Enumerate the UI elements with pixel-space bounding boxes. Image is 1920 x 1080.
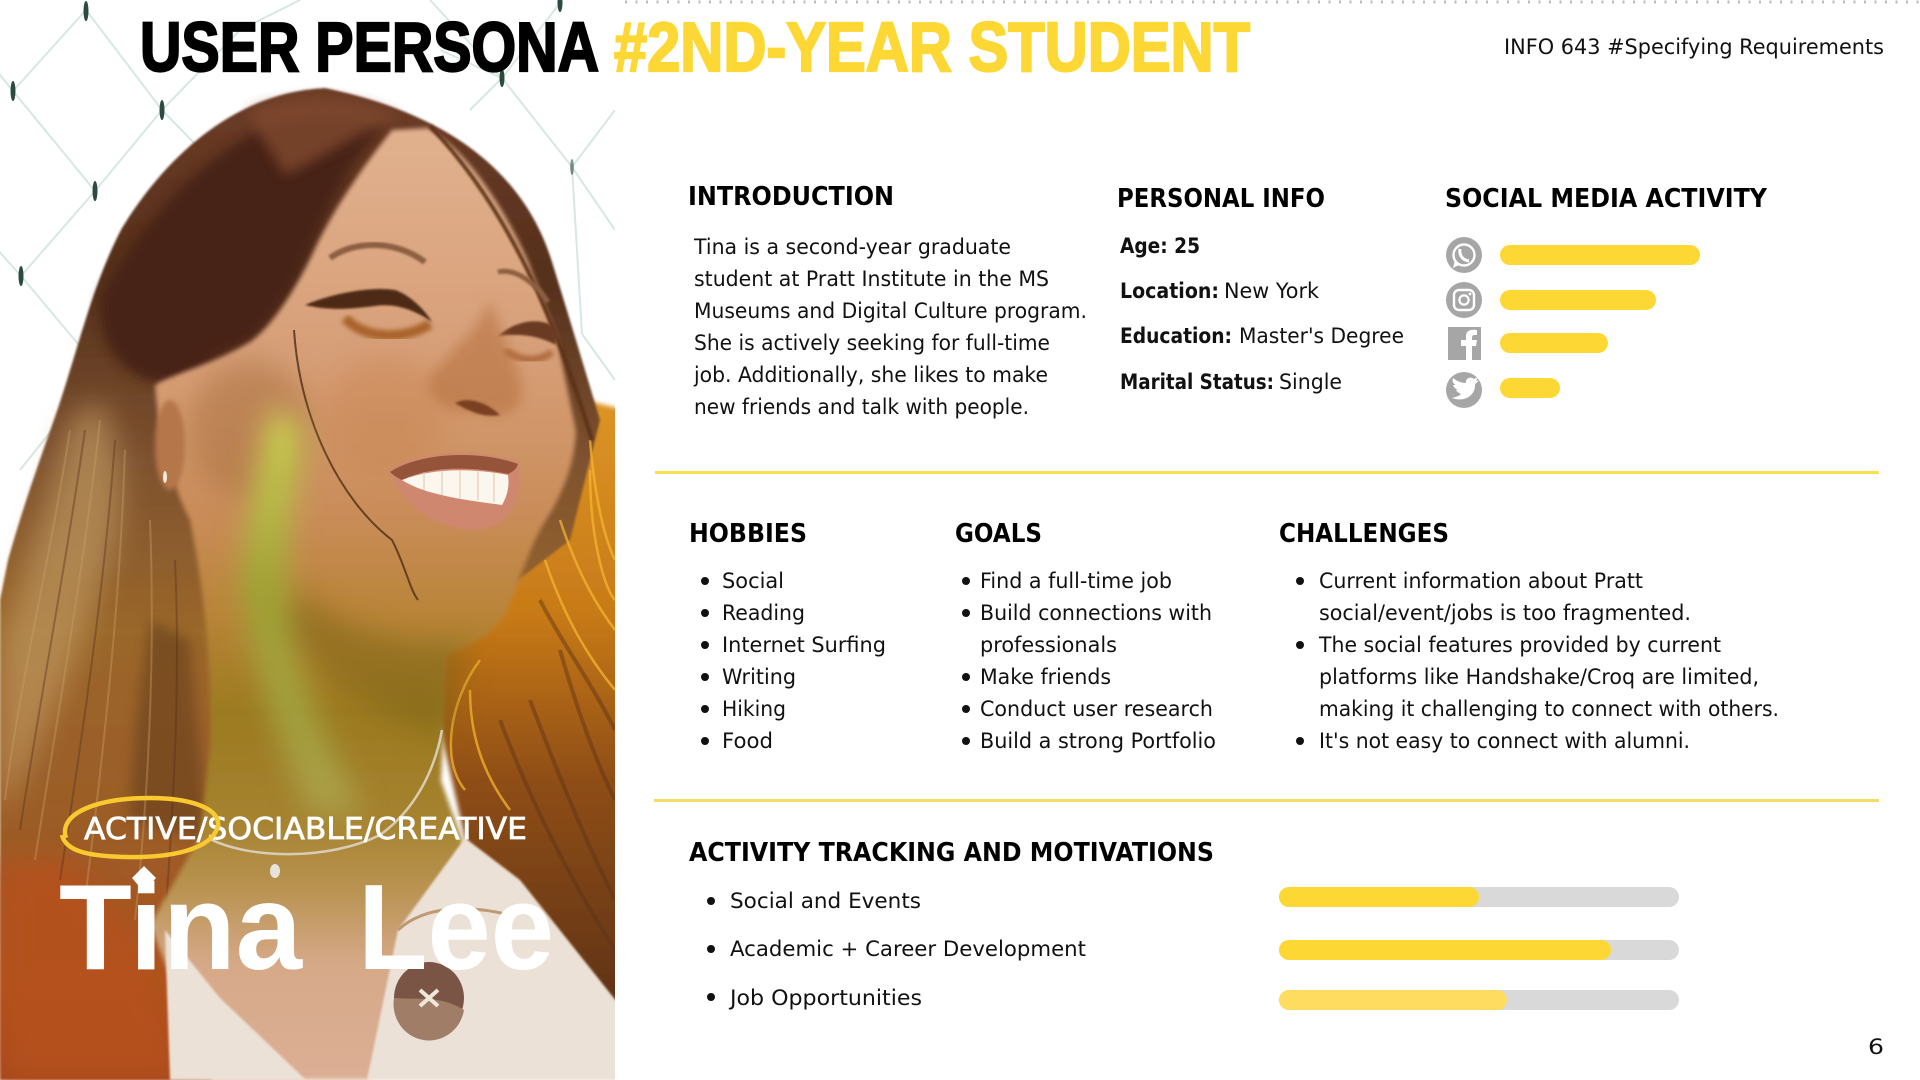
panel: introduction [688,182,1087,419]
panel: personal info: Education: [1120,324,1232,348]
smile [390,453,519,530]
panel: personal info: Single [1279,370,1342,394]
panel: goals: professionals [980,633,1117,657]
fence knots [10,0,574,286]
panel: personal info: Marital Status: [1120,370,1274,394]
ear [155,400,185,490]
panel: activity tracking and motivations: Job Opportunities [728,986,922,1010]
panel: introduction: job. Additionally, she likes to make [693,363,1048,387]
hair strands [5,420,152,920]
panel: introduction: Tina is a second-year graduate [693,235,1011,259]
course label: INFO 643 #Specifying Requirements [1504,35,1884,59]
hair side strand [294,330,418,600]
main hair [0,88,600,1080]
panel: personal info: Master's Degree [1239,324,1404,348]
right hair lit strands [451,440,615,810]
panel: personal info: Location: [1120,279,1219,303]
light hair parting [250,98,400,175]
panel: social media activity [1445,184,1768,408]
panel: challenges: making it challenging to connect with others. [1319,697,1779,721]
shirt button [394,962,464,1040]
panel: goals: Build a strong Portfolio [980,729,1216,753]
photo background: wire fence [0,0,615,470]
panel: hobbies: Internet Surfing [722,633,886,657]
panel: goals: Find a full-time job [980,569,1172,593]
panel: introduction: She is actively seeking for full-time [694,331,1050,355]
blouse left [165,930,306,1080]
right eye [498,321,556,359]
divider [655,471,1879,474]
icon: facebook [1448,327,1481,360]
panel: hobbies: Hiking [722,697,786,721]
panel: challenges: platforms like Handshake/Croq are limited, [1319,665,1759,689]
bar: facebook [1500,333,1608,353]
panel: goals: Make friends [980,665,1111,689]
bar: whatsapp [1500,245,1700,265]
right side back hair glow [440,398,615,1002]
panel: hobbies: Social [722,569,784,593]
panel: personal info: Age: 25 [1120,234,1200,258]
nose [428,300,522,416]
progress bar: academic and career development [1279,940,1679,960]
cheek shading [332,356,438,454]
panel: activity tracking and motivations: ACTIVITY TRACKING AND MOTIVATIONS [689,838,1214,868]
panel: activity tracking and motivations: Social and Events [730,889,921,913]
bar: twitter [1500,378,1560,398]
panel: challenges: CHALLENGES [1279,519,1449,549]
panel: personal info [1117,184,1404,394]
neck shadow [270,590,470,740]
panel: personal info: PERSONAL INFO [1117,184,1325,214]
panel: challenges: social/event/jobs is too fragmented. [1319,601,1691,625]
left eye [305,289,432,335]
panel: activity tracking and motivations [689,838,1679,1010]
divider [654,799,1879,802]
left hair highlights [0,400,121,820]
panel: introduction: student at Pratt Institute in the MS [694,267,1049,291]
panel: introduction: Museums and Digital Culture program. [694,299,1087,323]
panel: personal info: New York [1224,279,1320,303]
page number: 6 [1868,1035,1884,1059]
panel: goals: Build connections with [980,601,1212,625]
progress bar: job opportunities [1279,990,1679,1010]
panel: goals: GOALS [955,519,1042,549]
necklace [208,730,442,854]
hand-drawn circle highlight [62,798,218,857]
icon: instagram [1446,282,1482,318]
panel: challenges: The social features provided by current [1318,633,1721,657]
panel: challenges [1279,519,1779,753]
blouse right [367,838,625,1080]
panel: challenges: It's not easy to connect with alumni. [1319,729,1690,753]
dark hair crown [100,118,385,385]
panel: challenges: Current information about Pratt [1319,569,1643,593]
persona name: Tina [59,859,303,995]
panel: hobbies: HOBBIES [689,519,807,549]
panel: hobbies: Writing [722,665,796,689]
title: USER PERSONA [140,8,599,86]
panel: goals [955,519,1216,753]
face, neck and chest skin [150,128,576,1080]
panel: hobbies: Food [722,729,773,753]
panel: introduction: new friends and talk with people. [694,395,1029,419]
panel: activity tracking and motivations: Academic + Career Development [730,937,1086,961]
panel: hobbies: Reading [722,601,805,625]
bar: instagram [1500,290,1656,310]
title [140,8,1250,86]
persona name: Lee [358,859,554,995]
progress bar: social and events [1279,887,1679,907]
icon: whatsapp [1446,237,1482,273]
eyebrows [330,245,425,262]
persona name [59,859,554,995]
tagline: ACTIVE/SOCIABLE/CREATIVE [84,812,527,847]
photo: portrait of Tina Lee [0,0,625,1080]
panel: introduction: INTRODUCTION [688,182,894,212]
icon: twitter [1446,372,1482,408]
header dotted line [625,0,1920,4]
rainbow lens flare [240,411,362,816]
title: #2ND-YEAR STUDENT [614,8,1250,86]
panel: hobbies [689,519,886,753]
panel: social media activity: SOCIAL MEDIA ACTIVITY [1445,184,1768,214]
panel: goals: Conduct user research [980,697,1213,721]
